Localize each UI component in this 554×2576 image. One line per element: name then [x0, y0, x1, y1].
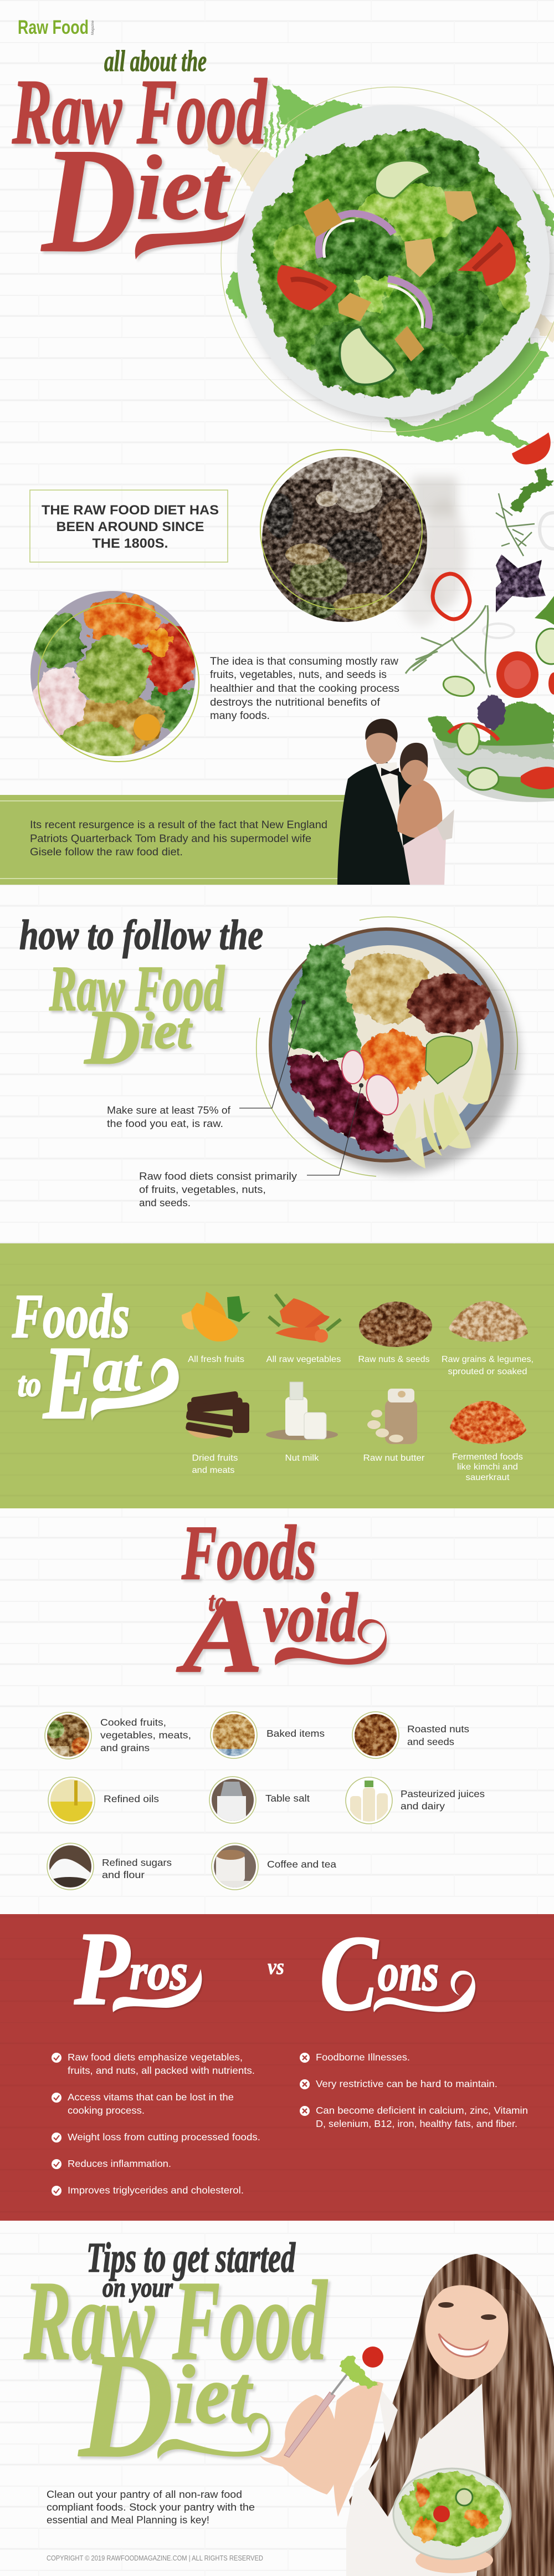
lettuce on fork: [340, 2355, 379, 2386]
item: salt: [209, 1777, 310, 1823]
section: how to follow: [19, 912, 263, 1080]
text: tips paragraph: compliant foods. Stock your pantry with the: [47, 2501, 255, 2513]
callout: 75 percent: Make sure at least 75% of: [107, 1104, 231, 1116]
label: fermented: sauerkraut: [465, 1473, 510, 1482]
label: grains: Raw grains & legumes,: [442, 1355, 534, 1364]
text: the idea: fruits, vegetables, nuts, and seeds is: [210, 669, 387, 681]
con 3: D, selenium, B12, iron, healthy fats, and fiber.: [316, 2118, 517, 2129]
heading: tips to get started: Tips to get started: [86, 2235, 296, 2281]
heading: Raw Food Diet: [23, 2258, 328, 2488]
heading: vs: vs: [268, 1954, 284, 1979]
tomato right: [458, 226, 516, 286]
item: cooked: and grains: [100, 1742, 150, 1753]
line: all about the: all about the: [104, 44, 207, 78]
panel: pros vs cons: [0, 1911, 554, 2221]
photo: historic market crowd: [260, 450, 465, 626]
parsley: [510, 468, 554, 511]
line: Raw Food: Raw Food: [12, 60, 268, 164]
label: grains: sprouted or soaked: [448, 1367, 527, 1376]
top: [346, 2384, 488, 2576]
label: nuts: Raw nuts & seeds: [358, 1355, 430, 1364]
item: sugars: Refined sugars: [102, 1857, 172, 1868]
carrots: [359, 1029, 430, 1094]
pear slices: [463, 1031, 491, 1105]
pro 1: fruits, and nuts, all packed with nutrients.: [68, 2065, 255, 2076]
item: oils: [48, 1777, 159, 1824]
her head: [400, 747, 428, 785]
item: nut milk: [266, 1382, 338, 1440]
heading: on your: on your: [102, 2272, 173, 2303]
hair back: [349, 2254, 554, 2576]
callout: since the 1800s: [30, 490, 228, 562]
ring: [38, 603, 199, 762]
plate: [243, 111, 554, 424]
cucumber slice: [442, 674, 476, 698]
ring arcs around plate: [257, 917, 517, 1176]
plate rim: [269, 927, 504, 1162]
callout: primarily fruits: and seeds.: [139, 1197, 191, 1208]
band: resurgence: Its recent resurgence is a result of the fact that New England: [30, 819, 327, 831]
heading: Foods to Eat: to: [18, 1366, 41, 1404]
text: tips paragraph: essential and Meal Planning is key!: [47, 2514, 209, 2526]
heading: Raw Food Diet: D: [84, 994, 140, 1080]
text: the idea: healthier and that the cooking process: [210, 683, 399, 695]
bowl: [393, 2468, 511, 2559]
list: pros: [52, 2052, 260, 2196]
cucumber top: [375, 161, 430, 198]
pro 5: Improves triglycerides and cholesterol.: [68, 2185, 244, 2196]
heading: how to follow the: how to follow the: [19, 912, 263, 958]
heading: Foods to Avoid: Foods: [181, 1510, 316, 1596]
item: kimchi: [450, 1401, 526, 1444]
label: butter: Raw nut butter: [363, 1453, 425, 1463]
bell pepper ring: [433, 574, 470, 619]
pro 3: Weight loss from cutting processed foods.: [68, 2131, 260, 2143]
face: [425, 2285, 509, 2379]
con 3: Can become deficient in calcium, zinc, Vitamin: [316, 2105, 528, 2116]
callout: since the 1800s: THE 1800S.: [92, 536, 168, 551]
item: dried meats: [185, 1391, 249, 1439]
hero brush strokes and ring: [208, 83, 554, 446]
heading: Foods to Avoid: [177, 1510, 387, 1695]
photo: smiling woman with salad: [260, 2254, 554, 2576]
label: fermented: like kimchi and: [457, 1462, 518, 1472]
text: the idea: The idea is that consuming mostly raw: [210, 656, 398, 667]
callout: since the 1800s: BEEN AROUND SINCE: [57, 519, 204, 534]
band: resurgence: [0, 795, 355, 885]
shirt: [376, 762, 403, 848]
cucumber bottom: [340, 327, 396, 385]
red tomato edge: [548, 672, 554, 695]
heading: Pros: ros: [130, 1944, 188, 2000]
radish: [32, 668, 85, 734]
heading: Raw Food Diet: iet: [140, 1002, 192, 1059]
bowl base: [30, 591, 197, 757]
ring: [260, 450, 422, 609]
bow tie: [381, 768, 399, 776]
label: milk: Nut milk: [285, 1453, 320, 1463]
item: coffee: [212, 1843, 336, 1890]
her dress: [403, 820, 447, 885]
item: roasted: and seeds: [407, 1736, 454, 1747]
callout: since the 1800s: THE RAW FOOD DIET HAS: [42, 503, 219, 518]
item: carrots: [269, 1294, 341, 1343]
band: resurgence: Gisele follow the raw food diet.: [30, 846, 183, 858]
photo: vegetable bowl: [30, 591, 199, 763]
item: orange: [182, 1292, 250, 1341]
section: foods to avoid: [45, 1510, 485, 1890]
heading: Foods to Avoid: A: [177, 1578, 263, 1695]
flourish: [135, 213, 245, 259]
callout: 75 percent: the food you eat, is raw.: [107, 1118, 223, 1129]
heading: Raw Food Diet: iet: [173, 2349, 253, 2441]
con 2: Very restrictive can be hard to maintain.: [316, 2078, 497, 2089]
line: Diet: D: [40, 118, 136, 283]
heading: Foods to Eat: [12, 1282, 179, 1441]
list: cons: [300, 2052, 528, 2129]
croutons: [304, 198, 342, 237]
heading: Raw Food Diet: Raw Food: [49, 953, 225, 1024]
label: fruits: All fresh fruits: [188, 1355, 244, 1364]
con 1: Foodborne Illnesses.: [316, 2052, 410, 2063]
heading: Foods to Avoid: void: [263, 1580, 358, 1656]
heading: Cons: C: [320, 1914, 379, 2033]
heading: Cons: [320, 1914, 475, 2033]
label: grains: [442, 1355, 534, 1376]
item: nuts: [359, 1302, 432, 1347]
lettuce: [252, 132, 528, 397]
cherry tomato: [362, 2347, 383, 2368]
avocado: [425, 1036, 472, 1084]
her arms and torso: [397, 781, 442, 843]
cucumber right: [536, 629, 554, 664]
label: fermented: [452, 1452, 523, 1482]
text: the idea: destroys the nutritional benefits of: [210, 697, 381, 708]
radish: [342, 1050, 364, 1084]
carrot: [86, 595, 158, 644]
bowl cucumber top: [457, 723, 479, 754]
onion ring two: [483, 624, 514, 638]
bowl glass: [433, 737, 554, 802]
plate: raw food bowl: [269, 927, 519, 1174]
label: dried: and meats: [192, 1466, 235, 1475]
label: dried: [192, 1453, 238, 1475]
greens: [144, 687, 199, 732]
heading: Pros: P: [74, 1911, 131, 2027]
item: salt: Table salt: [265, 1793, 310, 1804]
item: sugars: [47, 1843, 172, 1890]
heading: Raw Food Diet: [49, 953, 225, 1080]
faded background: [402, 477, 465, 626]
line: Raw Food: [12, 60, 268, 283]
item: juices: Pasteurized juices: [401, 1788, 485, 1799]
item: grains: [449, 1301, 528, 1342]
cucumber: [34, 613, 83, 668]
pro 2: cooking process.: [68, 2105, 145, 2116]
item: roasted: [352, 1712, 469, 1758]
bowl hand: [416, 2547, 493, 2573]
label: fermented: Fermented foods: [452, 1452, 523, 1462]
bowl pepper: [521, 767, 554, 789]
pro 2: [52, 2092, 234, 2116]
callout: 75 percent: [107, 1000, 306, 1129]
item: baked: Baked items: [266, 1728, 325, 1739]
item: cooked: vegetables, meats,: [100, 1730, 191, 1741]
pro 1: Raw food diets emphasize vegetables,: [68, 2052, 243, 2063]
romanesco: [60, 721, 135, 756]
logo: Magazine: [91, 20, 95, 35]
his head: [366, 722, 396, 764]
item: oils: Refined oils: [104, 1793, 159, 1804]
onion ring: [540, 513, 554, 549]
heading: Foods to Eat: at: [93, 1336, 142, 1404]
heading: Raw Food Diet: Raw Food: [23, 2258, 328, 2384]
item: sugars: and flour: [102, 1869, 145, 1880]
beets: [288, 1053, 400, 1153]
falling vegetables illustration: [406, 432, 554, 802]
quinoa: [409, 974, 489, 1035]
logo: Raw Food: [18, 17, 89, 38]
heading: Foods to Eat: Foods: [12, 1282, 130, 1351]
photo: Tom Brady and Gisele: [337, 719, 454, 885]
avocado: [76, 635, 150, 706]
copyright: COPYRIGHT © 2019 RAWFOODMAGAZINE.COM | ALL RIGHTS RESERVED: [47, 2554, 263, 2562]
item: roasted: Roasted nuts: [407, 1723, 469, 1735]
item: cooked: [45, 1712, 191, 1759]
tomatoes: [141, 620, 197, 693]
heading: Foods to Eat: E: [43, 1325, 93, 1441]
label: vegetables: All raw vegetables: [266, 1355, 341, 1364]
band: resurgence: Patriots Quarterback Tom Brady and his supermodel wife: [30, 833, 311, 845]
text: tips paragraph: Clean out your pantry of all non-raw food: [47, 2488, 242, 2500]
text: the idea: many foods.: [210, 710, 270, 722]
callout: primarily fruits: of fruits, vegetables, nuts,: [139, 1184, 266, 1195]
con 3: [300, 2105, 528, 2129]
shoulder and arm: [333, 2381, 383, 2517]
pro 1: [52, 2052, 255, 2076]
panel: foods to eat: [0, 1243, 554, 1508]
section: tips heading: [23, 2235, 328, 2488]
callout: primarily fruits: Raw food diets consist primarily: [139, 1170, 297, 1182]
heading: Pros: [74, 1911, 202, 2027]
dill branch: [406, 605, 490, 687]
text: the idea: [210, 656, 399, 722]
heading: Raw Food Diet: D: [77, 2323, 173, 2488]
tomato wedge: [512, 432, 551, 465]
chickpeas: [74, 697, 166, 754]
item: coffee: Coffee and tea: [267, 1859, 336, 1870]
pro 2: Access vitams that can be lost in the: [68, 2092, 234, 2103]
kale: [288, 942, 360, 1062]
parsley right: [535, 596, 554, 625]
purple basil: [496, 554, 546, 613]
circular crop: [260, 455, 429, 624]
bowl cucumber: [468, 768, 499, 790]
item: juices: [346, 1777, 485, 1824]
item: juices: and dairy: [401, 1800, 445, 1812]
tomato left: [277, 265, 337, 310]
hand and fork: [260, 2395, 339, 2495]
item: baked: [211, 1712, 325, 1758]
suit: [337, 761, 440, 885]
heading: Cons: ons: [378, 1943, 439, 2002]
callout: primarily fruits: [139, 1083, 363, 1208]
bowl greens: [427, 696, 554, 759]
onion arcs: [319, 213, 393, 258]
hero salad plate: [237, 105, 554, 424]
pro 4: Reduces inflammation.: [68, 2158, 171, 2169]
hair front: [368, 2289, 554, 2576]
tomato slice: [496, 651, 538, 698]
title: all about the Raw Food Diet: [12, 44, 268, 283]
item: nut butter: [367, 1389, 417, 1444]
label: dried: Dried fruits: [192, 1453, 238, 1463]
chickpeas: [345, 952, 431, 1021]
heading: Foods to Avoid: to: [208, 1586, 227, 1617]
line: Diet: iet: [136, 137, 230, 238]
text: tips paragraph: [47, 2488, 255, 2526]
dill sprig: [496, 493, 535, 556]
item: cooked: Cooked fruits,: [100, 1717, 166, 1728]
